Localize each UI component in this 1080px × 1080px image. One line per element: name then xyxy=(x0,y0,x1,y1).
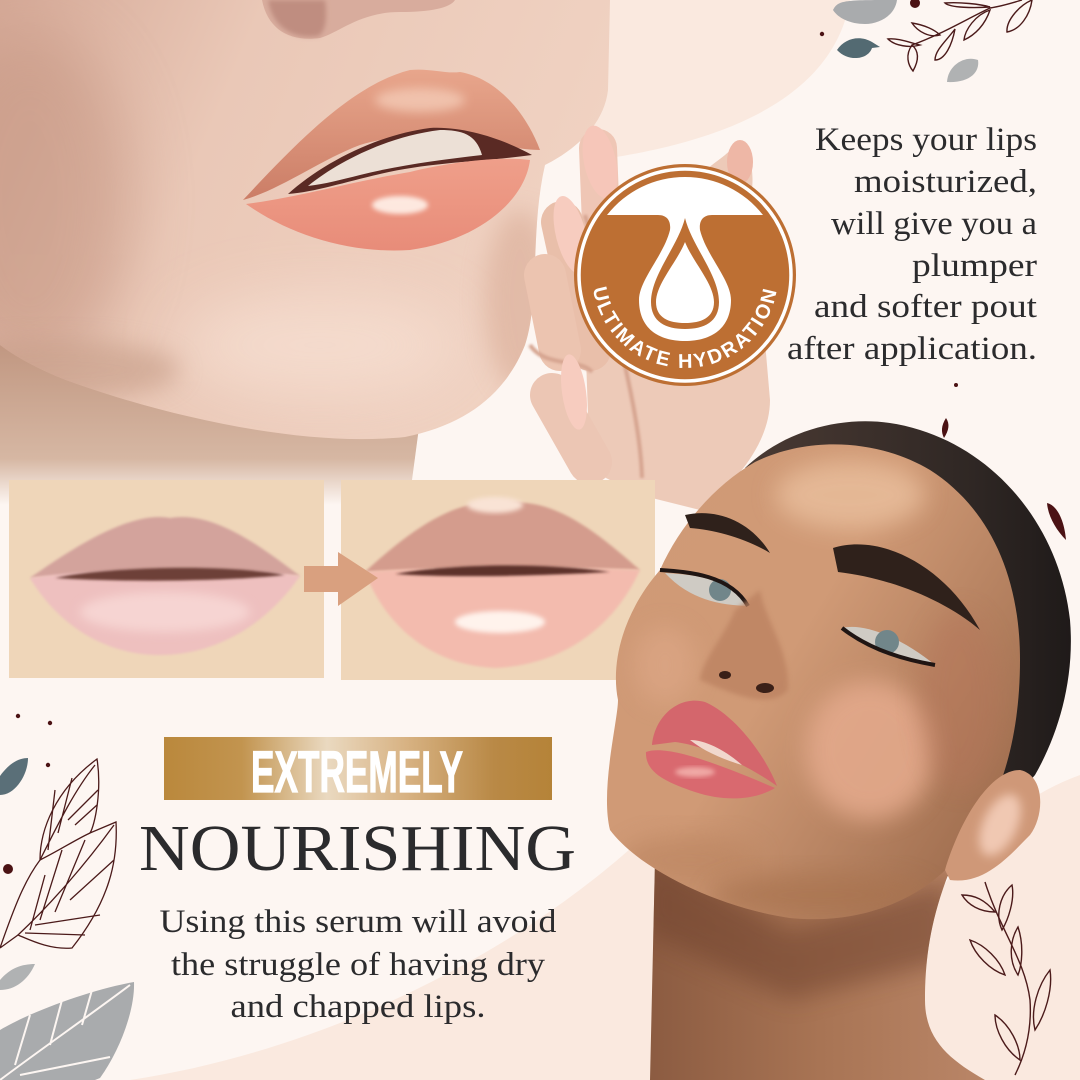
face shading xyxy=(0,30,555,400)
text block: hydration description xyxy=(787,122,1037,367)
text block: hydration description: after application. xyxy=(787,331,1037,367)
icon: leaf sprig top right xyxy=(888,0,1032,71)
badge curved label: ULTIMATE HYDRATION xyxy=(594,286,776,368)
finger 3 xyxy=(545,275,560,350)
photo: lips after xyxy=(341,480,655,680)
text block: hydration description: and softer pout xyxy=(814,289,1037,325)
lower lip xyxy=(246,159,530,251)
eyebrows xyxy=(685,513,770,553)
hair xyxy=(745,421,1071,885)
banner: extremely: EXTREMELY xyxy=(251,740,463,805)
text block: hydration description: will give you a xyxy=(831,206,1037,242)
text block: serum description: Using this serum will avoid xyxy=(160,904,557,940)
nose xyxy=(700,590,788,700)
icon: outlined leaves lower left xyxy=(0,759,116,948)
text block: serum description xyxy=(160,904,557,1025)
icon: ultimate hydration badge xyxy=(574,164,796,386)
finger 2 xyxy=(562,222,590,350)
background swoosh: lower xyxy=(130,775,1080,1080)
background swoosh: top right xyxy=(590,0,850,158)
banner: extremely xyxy=(164,737,552,805)
eyes xyxy=(665,573,748,606)
face highlights xyxy=(626,454,944,915)
icon: grey leaf large xyxy=(0,982,134,1080)
ear xyxy=(945,770,1040,881)
neck below jaw xyxy=(0,340,420,505)
text block: hydration description: plumper xyxy=(912,248,1037,284)
photo: close-up of glossy lips and hand xyxy=(0,0,770,510)
finger 4 xyxy=(552,395,590,462)
text block: serum description: and chapped lips. xyxy=(230,989,486,1025)
photo: woman portrait xyxy=(607,421,1071,1080)
hand back xyxy=(585,148,770,510)
icon: small leaves lower left xyxy=(0,758,35,990)
icon: grey and slate leaves top right xyxy=(833,0,978,82)
mouth and teeth xyxy=(288,128,532,194)
finger creases xyxy=(530,215,642,478)
heading: nourishing: NOURISHING xyxy=(139,812,576,885)
text block: hydration description: Keeps your lips xyxy=(815,122,1037,158)
fingernails xyxy=(547,122,753,431)
face skin xyxy=(0,0,610,439)
arrow: before to after xyxy=(304,552,378,606)
nose xyxy=(262,0,455,39)
decorative dots xyxy=(3,0,1066,874)
neck xyxy=(650,868,985,1080)
face xyxy=(607,444,1020,919)
lips xyxy=(652,701,777,786)
photo: lips before xyxy=(9,480,324,678)
text block: serum description: the struggle of having dry xyxy=(171,947,546,983)
icon: leaf sprig bottom right xyxy=(962,882,1051,1075)
finger 1 xyxy=(598,148,602,250)
text block: hydration description: moisturized, xyxy=(854,164,1037,200)
upper lip xyxy=(243,70,540,200)
icon: water drop xyxy=(607,177,763,341)
